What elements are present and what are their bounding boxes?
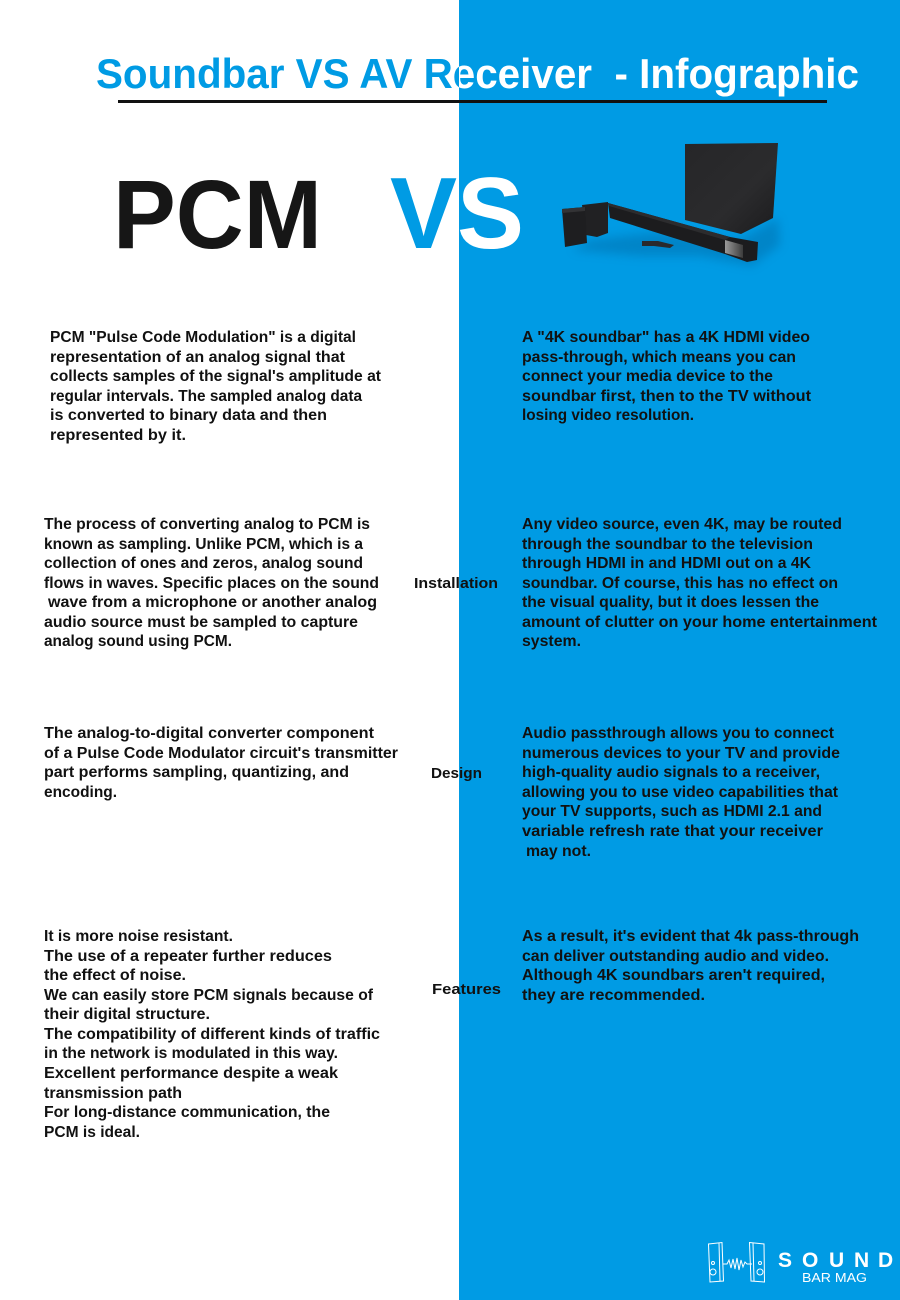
- soundbar product image: [562, 143, 780, 266]
- text: PCM definition: represented by it.: [50, 427, 186, 444]
- label: Design: Design: [431, 765, 482, 782]
- text: PCM definition: representation of an analog signal that: [50, 349, 345, 366]
- text: soundbar installation: system.: [522, 633, 581, 650]
- label: Installation: Installation: [414, 575, 498, 592]
- text: PCM definition: PCM "Pulse Code Modulation" is a digital: [50, 329, 356, 346]
- text: PCM installation: collection of ones and zeros, analog sound: [44, 555, 363, 572]
- text: soundbar installation: amount of clutter on your home entertainment: [522, 614, 877, 631]
- text: PCM design: of a Pulse Code Modulator circuit's transmitter: [44, 745, 398, 762]
- text: PCM features: It is more noise resistant.: [44, 928, 233, 945]
- text: soundbar installation: [522, 516, 877, 650]
- wordmark: SOUND: SOUND: [778, 1249, 893, 1272]
- text: 4K soundbar definition: [522, 329, 811, 424]
- text: PCM features: The use of a repeater further reduces: [44, 948, 332, 965]
- text: soundbar design: high-quality audio signals to a receiver,: [522, 764, 820, 781]
- text: soundbar installation: through HDMI in and HDMI out on a 4K: [522, 555, 812, 572]
- text: PCM design: [44, 725, 398, 801]
- text: PCM design: encoding.: [44, 784, 117, 801]
- text: soundbar design: Audio passthrough allows you to connect: [522, 725, 834, 742]
- text: PCM installation: audio source must be sampled to capture: [44, 614, 358, 631]
- logo: Sound Bar Mag: [708, 1242, 893, 1285]
- text: PCM installation: analog sound using PCM.: [44, 633, 232, 650]
- text: soundbar design: your TV supports, such as HDMI 2.1 and: [522, 803, 822, 820]
- text: PCM features: The compatibility of different kinds of traffic: [44, 1026, 380, 1043]
- text: soundbar features: [522, 928, 859, 1004]
- text: PCM definition: [50, 329, 381, 444]
- text: soundbar installation: through the soundbar to the television: [522, 536, 813, 553]
- text: PCM installation: The process of converting analog to PCM is: [44, 516, 370, 533]
- text: soundbar features: they are recommended.: [522, 987, 705, 1004]
- text: PCM features: their digital structure.: [44, 1006, 210, 1023]
- title: Soundbar VS AV Receiver - Infographic: [96, 50, 859, 97]
- rear speakers: [562, 202, 608, 247]
- blue right panel background: [459, 0, 900, 1300]
- text: soundbar design: may not.: [526, 843, 591, 860]
- heading: VS: VS: [390, 158, 524, 270]
- text: soundbar design: allowing you to use video capabilities that: [522, 784, 838, 801]
- text: soundbar design: variable refresh rate that your receiver: [522, 823, 823, 840]
- soundbar: [608, 203, 758, 262]
- text: PCM definition: collects samples of the signal's amplitude at: [50, 368, 381, 385]
- heading: PCM: PCM: [113, 160, 322, 269]
- text: PCM features: in the network is modulated in this way.: [44, 1045, 338, 1062]
- text: PCM features: We can easily store PCM signals because of: [44, 987, 374, 1004]
- text: PCM installation: wave from a microphone or another analog: [47, 594, 377, 611]
- text: soundbar features: Although 4K soundbars aren't required,: [522, 967, 825, 984]
- text: soundbar installation: Any video source, even 4K, may be routed: [522, 516, 842, 533]
- text: PCM features: Excellent performance despite a weak: [44, 1065, 338, 1082]
- text: PCM design: part performs sampling, quantizing, and: [44, 764, 349, 781]
- text: PCM design: The analog-to-digital converter component: [44, 725, 374, 742]
- title: Soundbar VS AV Receiver - Infographic: [96, 50, 859, 97]
- text: soundbar installation: the visual quality, but it does lessen the: [522, 594, 819, 611]
- text: 4K soundbar definition: A "4K soundbar" has a 4K HDMI video: [522, 329, 810, 346]
- heading: VS: VS: [390, 158, 524, 270]
- text: soundbar design: numerous devices to your TV and provide: [522, 745, 840, 762]
- title underline: [118, 100, 827, 103]
- text: PCM features: the effect of noise.: [44, 967, 186, 984]
- heading: VS: [390, 177, 520, 249]
- text: PCM definition: regular intervals. The sampled analog data: [50, 388, 362, 405]
- text: PCM features: PCM is ideal.: [44, 1124, 140, 1141]
- subwoofer: [685, 143, 778, 234]
- label: Features: Features: [432, 981, 501, 998]
- text: soundbar installation: soundbar. Of course, this has no effect on: [522, 575, 838, 592]
- text: PCM installation: known as sampling. Unlike PCM, which is a: [44, 536, 363, 553]
- icon: speakers with waveform: [708, 1242, 764, 1282]
- text: PCM installation: flows in waves. Specific places on the sound: [44, 575, 379, 592]
- text: soundbar design: [522, 725, 840, 860]
- remote: [642, 241, 674, 248]
- text: 4K soundbar definition: losing video resolution.: [522, 407, 694, 424]
- text: PCM features: transmission path: [44, 1085, 182, 1102]
- text: PCM installation: [44, 516, 379, 650]
- text: 4K soundbar definition: soundbar first, then to the TV without: [522, 388, 811, 405]
- text: soundbar features: can deliver outstanding audio and video.: [522, 948, 829, 965]
- text: soundbar features: As a result, it's evident that 4k pass-through: [522, 928, 859, 945]
- wordmark: BAR MAG: BAR MAG: [802, 1270, 867, 1285]
- text: PCM features: [44, 928, 380, 1141]
- text: PCM definition: is converted to binary data and then: [50, 407, 327, 424]
- shadow: [572, 218, 780, 266]
- text: 4K soundbar definition: connect your media device to the: [522, 368, 773, 385]
- text: 4K soundbar definition: pass-through, which means you can: [522, 349, 796, 366]
- text: PCM features: For long-distance communication, the: [44, 1104, 330, 1121]
